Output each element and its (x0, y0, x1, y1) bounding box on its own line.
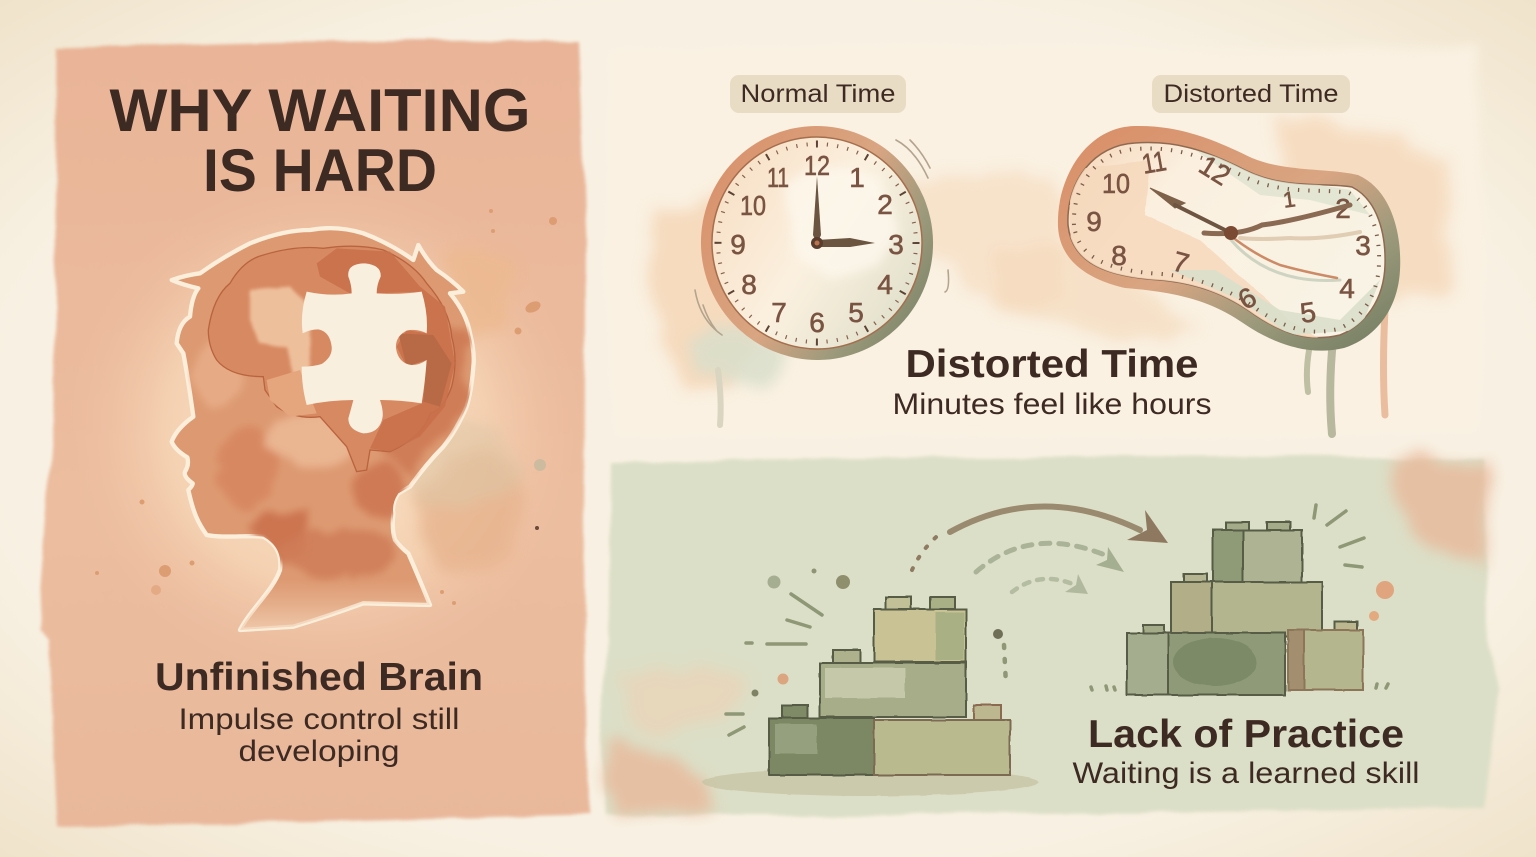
clock numerals: 11 (767, 162, 789, 193)
head watercolor mottling (193, 320, 470, 640)
title: IS HARD (203, 137, 437, 204)
melted rim (1058, 126, 1400, 351)
head silhouette with puzzle piece (172, 228, 474, 640)
clock numerals: 3 (888, 229, 904, 260)
brain darker lobes (317, 248, 455, 452)
neck fade (240, 589, 430, 630)
distorted numerals: 1 (1281, 186, 1297, 213)
clock numerals: 2 (877, 189, 893, 220)
back right block (1288, 630, 1363, 690)
pill: distorted time: Distorted Time (1164, 80, 1338, 108)
caption: distorted time: Distorted Time (906, 343, 1198, 386)
panel background wash (600, 456, 1498, 815)
block studs (782, 597, 1001, 721)
paint splatters (95, 209, 557, 605)
distorted numerals: 8 (1111, 240, 1127, 271)
middle block (1171, 582, 1322, 637)
middle block (820, 663, 966, 717)
arrow: small dashed (1012, 574, 1088, 594)
title: WHY WAITING (110, 77, 530, 144)
pill: normal time (730, 75, 906, 113)
caption: distorted time: Minutes feel like hours (892, 388, 1212, 421)
distorted ticks (1074, 148, 1379, 332)
sparkle marks and dots (726, 505, 1394, 735)
caption: lack of practice: Lack of Practice (1088, 713, 1404, 756)
caption: unfinished brain: developing (238, 735, 400, 768)
melted face (1068, 142, 1385, 338)
clock numerals: 8 (741, 269, 757, 300)
head outline glow (172, 228, 474, 630)
melted clock drips (1307, 310, 1385, 434)
drip: normal clock (718, 370, 721, 425)
minute ticks (717, 143, 917, 343)
top block (1213, 530, 1302, 582)
arrow: large curved (912, 506, 1168, 570)
brain inner dark (398, 333, 452, 407)
panel background wash (606, 46, 1484, 437)
motion marks (695, 140, 949, 335)
distorted numerals: 10 (1102, 168, 1130, 199)
caption: lack of practice (1072, 713, 1420, 790)
clock rim (679, 104, 955, 382)
clock numerals: 6 (809, 307, 825, 338)
distorted hands (1150, 188, 1360, 280)
clock: normal time (679, 104, 955, 382)
caption: unfinished brain: Impulse control still (178, 703, 460, 736)
clock: distorted time (1058, 126, 1400, 434)
caption: unfinished brain (155, 656, 483, 768)
clock numerals: 9 (730, 229, 746, 260)
distorted numerals: 5 (1298, 296, 1318, 329)
caption: lack of practice: Waiting is a learned skill (1072, 757, 1420, 790)
white wash in face (785, 165, 900, 280)
caption: unfinished brain: Unfinished Brain (155, 656, 483, 699)
brain lower wash (267, 370, 317, 417)
distorted numerals: 3 (1355, 230, 1371, 261)
clock numerals: 1 (849, 162, 865, 193)
panel: unfinished brain (38, 40, 590, 825)
distorted numerals: 4 (1339, 273, 1355, 304)
distorted numerals: 12 (1194, 149, 1236, 192)
top block (874, 609, 966, 662)
distorted numerals (1086, 145, 1371, 329)
clock face (692, 117, 942, 369)
ground shadow (702, 768, 1038, 796)
title (110, 77, 530, 204)
panel: lack of practice (600, 456, 1498, 815)
clock numerals: 7 (771, 297, 787, 328)
side watercolor blots (407, 250, 522, 572)
hour ticks (717, 143, 917, 343)
clock numerals: 10 (740, 190, 766, 221)
bottom block (1127, 633, 1285, 695)
green wash under clock (690, 323, 786, 387)
brain shape (208, 246, 455, 472)
brain light wash patch (250, 287, 310, 383)
clock numerals (730, 150, 904, 338)
pill: distorted time (1152, 75, 1350, 113)
block studs (1143, 522, 1357, 634)
head glow (60, 175, 590, 685)
clock numerals: 4 (877, 269, 893, 300)
blocks: right stack (1127, 522, 1363, 695)
distorted numerals: 6 (1233, 281, 1262, 316)
arrow: middle dashed (976, 543, 1124, 572)
distorted numerals: 7 (1169, 245, 1192, 279)
panel: distorted time (606, 46, 1484, 437)
distorted numerals: 9 (1086, 206, 1102, 237)
caption: distorted time (892, 343, 1212, 421)
bottom left block (769, 718, 874, 775)
puzzle piece (302, 263, 427, 433)
pill: normal time: Normal Time (740, 80, 896, 108)
orange corner blots (612, 460, 1484, 812)
distorted numerals: 2 (1335, 193, 1351, 224)
clock numerals: 12 (804, 150, 830, 181)
clock numerals: 5 (848, 297, 864, 328)
distorted numerals: 11 (1140, 145, 1169, 180)
panel background wash (38, 40, 588, 825)
blocks: left stack (769, 597, 1010, 775)
face washes (1070, 150, 1380, 345)
bottom right block (874, 720, 1010, 775)
clock hands (811, 176, 875, 249)
peach watercolor blots (648, 115, 1450, 395)
